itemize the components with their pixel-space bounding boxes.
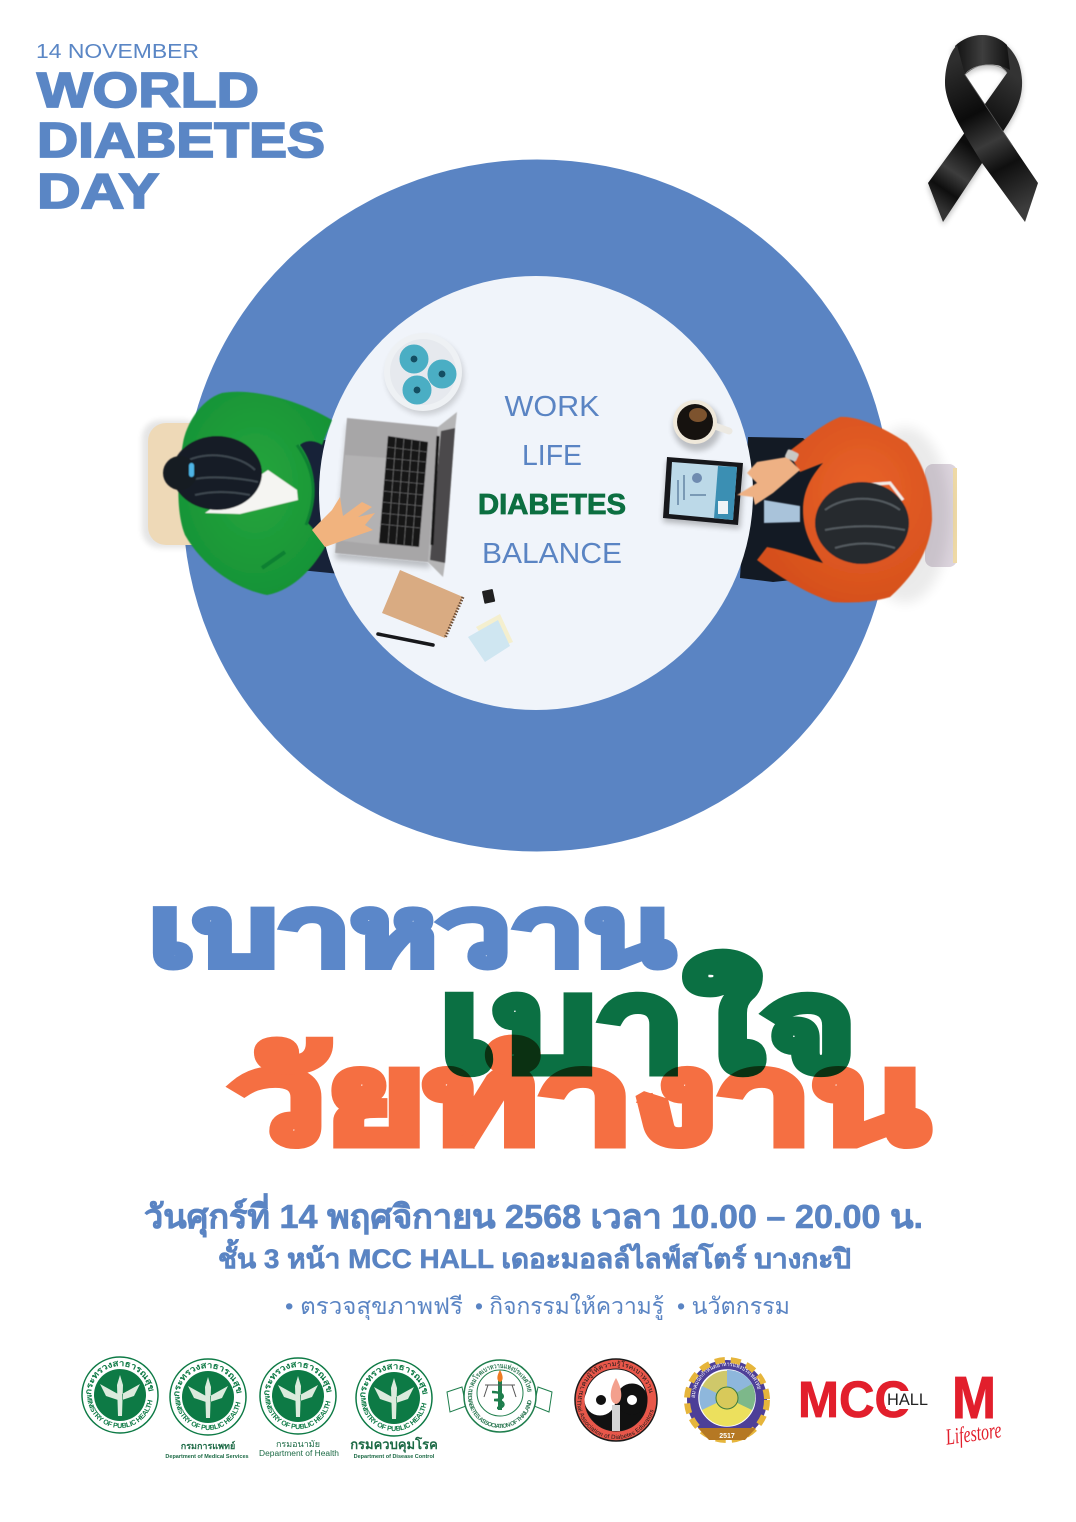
event date and time: วันศุกร์ที่ 14 พฤศจิกายน 2568 เวลา 10.00 – 20.00 น. <box>144 1193 923 1238</box>
logo: Department of Health: MINISTRY OF PUBLIC HEALTH <box>264 1396 330 1430</box>
campaign title: เบาหวาน เบาใจ วัยทำงาน: วัยทำงาน <box>230 1031 928 1169</box>
table text: work life diabetes balance: BALANCE <box>482 538 622 570</box>
chair: left <box>142 420 218 548</box>
logo: Diabetes Association of Thailand: สมาคมโรคเบาหวานแห่งประเทศไทย <box>468 1364 532 1396</box>
logo: Department of Medical Services: กรมการแพทย์ <box>181 1440 235 1451</box>
logo: MCC Hall: MCC <box>798 1371 910 1428</box>
logo: Ministry of Public Health: MINISTRY OF PUBLIC HEALTH <box>86 1395 152 1428</box>
logo: Ministry of Public Health <box>81 1356 159 1434</box>
heading: 14 November World Diabetes Day: 14 NOVEMBER <box>36 41 199 63</box>
icon: notebook and pen <box>378 570 463 645</box>
event activities: • กิจกรรมให้ความรู้ <box>475 1293 664 1320</box>
logo: Department of Disease Control: กระทรวงสาธารณสุข <box>360 1364 428 1398</box>
logo: Department of Disease Control: MINISTRY OF PUBLIC HEALTH <box>360 1398 426 1432</box>
heading: 14 November World Diabetes Day: DAY <box>37 165 159 219</box>
logo: Department of Disease Control: Department of Disease Control <box>354 1454 435 1460</box>
figure legs: orange shirt person <box>740 437 840 582</box>
logo: Diabetes Association of Thailand: DIABETES ASSOCIATION OF THAILAND <box>468 1396 532 1428</box>
table text: work life diabetes balance <box>478 391 626 570</box>
figure: person in orange sweater <box>737 417 932 602</box>
event activities: • ตรวจสุขภาพฟรี <box>285 1293 463 1320</box>
heading: 14 November World Diabetes Day: WORLD <box>37 64 259 118</box>
event activities <box>285 1293 790 1320</box>
figure: person in green sweater <box>163 392 332 595</box>
shadow: right figure on white <box>860 427 950 603</box>
logo: Thai Dietetic gear emblem: สมาคมนักกำหนดอาหารแห่งประเทศไทย <box>692 1362 761 1398</box>
table text: work life diabetes balance: DIABETES <box>478 489 626 521</box>
hand: green person's hand on laptop <box>312 497 375 547</box>
event activities: • นวัตกรรม <box>677 1293 790 1319</box>
logo: Thai Association of Diabetes Educators: Thai Association of Diabetes Educators <box>577 1400 654 1439</box>
table text: work life diabetes balance: LIFE <box>522 440 582 472</box>
event location: ชั้น 3 หน้า MCC HALL เดอะมอลล์ไลฟ์สโตร์ บางกะปิ <box>218 1238 851 1274</box>
logo: M Lifestore <box>943 1365 1003 1450</box>
table text: work life diabetes balance: WORK <box>504 391 600 423</box>
logo: Department of Medical Services: Department of Medical Services <box>165 1454 249 1460</box>
logo: Department of Medical Services: กระทรวงสาธารณสุข <box>174 1362 242 1396</box>
campaign title: เบาหวาน เบาใจ วัยทำงาน <box>149 879 928 1169</box>
logo: Department of Medical Services: MINISTRY OF PUBLIC HEALTH <box>174 1397 240 1430</box>
logo: Department of Health: กระทรวงสาธารณสุข <box>264 1362 332 1396</box>
logo: Department of Health: กรมอนามัย <box>276 1439 320 1449</box>
icon: binder clip <box>482 589 495 604</box>
logo: Thai Association of Diabetes Educators: สมาคมผู้ให้ความรู้โรคเบาหวาน <box>578 1360 653 1400</box>
heading: 14 November World Diabetes Day: DIABETES <box>37 114 325 168</box>
logo: Department of Disease Control <box>350 1359 438 1460</box>
logo: M Lifestore: Lifestore <box>943 1417 1003 1450</box>
logo: Department of Disease Control: กรมควบคุมโรค <box>350 1436 438 1453</box>
logo: Department of Medical Services <box>165 1358 249 1460</box>
logo: Thai Dietetic gear emblem: 2517 <box>719 1433 735 1440</box>
logo: Department of Health <box>259 1357 339 1458</box>
chair: right <box>925 464 957 567</box>
logo: Department of Health: Department of Health <box>259 1449 339 1458</box>
icon: tablet <box>663 457 745 529</box>
campaign title: เบาหวาน เบาใจ วัยทำงาน: เบาหวาน <box>149 879 674 986</box>
heading: 14 November World Diabetes Day <box>36 41 325 219</box>
figure legs: green shirt person <box>300 440 350 575</box>
logo: MCC Hall: HALL <box>887 1390 928 1409</box>
icon: laptop <box>335 412 457 577</box>
panel: large blue circle <box>183 160 891 852</box>
logo: Thai Association of Diabetes Educators <box>574 1358 658 1442</box>
icon: donuts on a plate <box>384 333 464 415</box>
logo: Ministry of Public Health: กระทรวงสาธารณสุข <box>86 1360 154 1394</box>
logo: M Lifestore: M <box>952 1365 996 1431</box>
campaign title: เบาหวาน เบาใจ วัยทำงาน: เบาใจ <box>440 953 856 1098</box>
logo: Thai Dietetic gear emblem <box>684 1357 770 1443</box>
logo: Diabetes Association of Thailand <box>446 1359 552 1433</box>
icon: coffee cup <box>673 400 729 451</box>
panel: inner table circle <box>319 276 753 710</box>
icon: sticky notes <box>468 614 513 662</box>
icon: black ribbon <box>928 35 1038 225</box>
